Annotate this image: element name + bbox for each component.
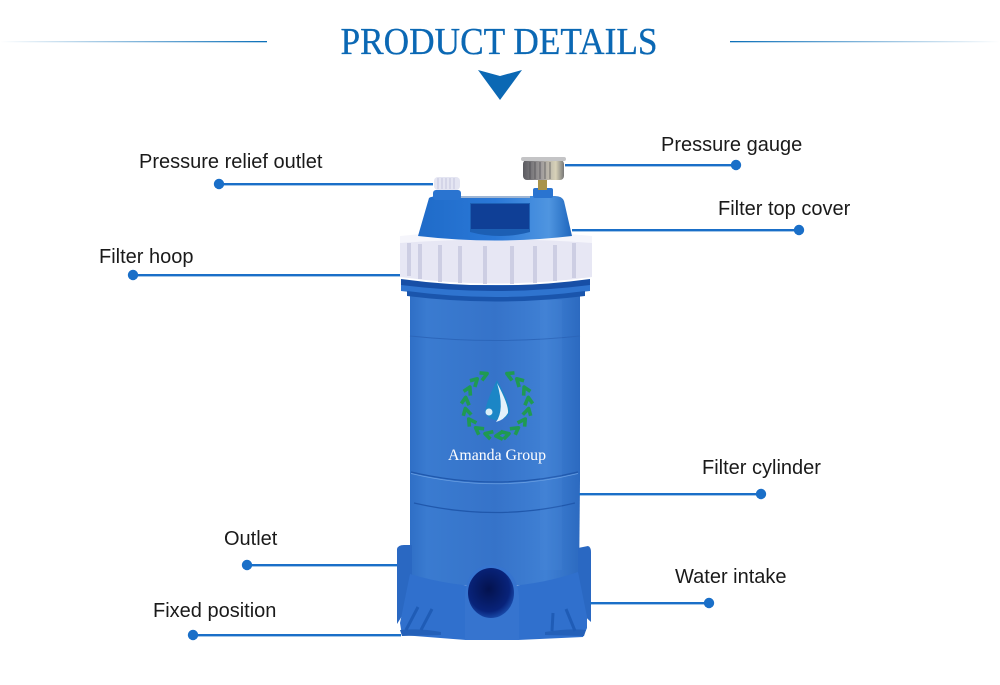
base [397, 545, 591, 640]
callout: filter top cover: Filter top cover [718, 198, 851, 220]
callout: filter cylinder: Filter cylinder [702, 457, 821, 479]
callout: filter hoop: Filter hoop [99, 246, 194, 268]
callout: fixed position: Fixed position [153, 600, 276, 622]
callout: filter cylinder [579, 457, 821, 499]
logo text: Amanda Group [448, 447, 546, 464]
pressure gauge [521, 157, 566, 198]
callout: water intake [590, 566, 787, 608]
title: PRODUCT DETAILS [340, 21, 658, 63]
right title rule [730, 41, 1000, 42]
filter hoop: rims [401, 279, 590, 302]
callout: pressure gauge [565, 134, 802, 170]
icon: down arrow [478, 70, 522, 100]
callout: outlet: Outlet [224, 528, 278, 550]
callout: pressure relief outlet [139, 151, 433, 189]
logo: wreath and drop [461, 371, 533, 439]
filter top cover [418, 196, 572, 240]
callout: pressure gauge: Pressure gauge [661, 134, 802, 156]
inlet hole [468, 568, 514, 618]
pressure relief knob [433, 177, 461, 200]
callout: filter hoop [99, 246, 400, 280]
callout: filter top cover [572, 198, 851, 235]
callout: fixed position [153, 600, 401, 640]
filter cylinder [410, 285, 580, 585]
callout: water intake: Water intake [675, 566, 787, 588]
callout: outlet [224, 528, 397, 570]
filter hoop: white ring [400, 231, 592, 284]
left title rule [0, 41, 267, 42]
product: water filter [397, 157, 592, 640]
callout: pressure relief outlet: Pressure relief outlet [139, 151, 323, 173]
